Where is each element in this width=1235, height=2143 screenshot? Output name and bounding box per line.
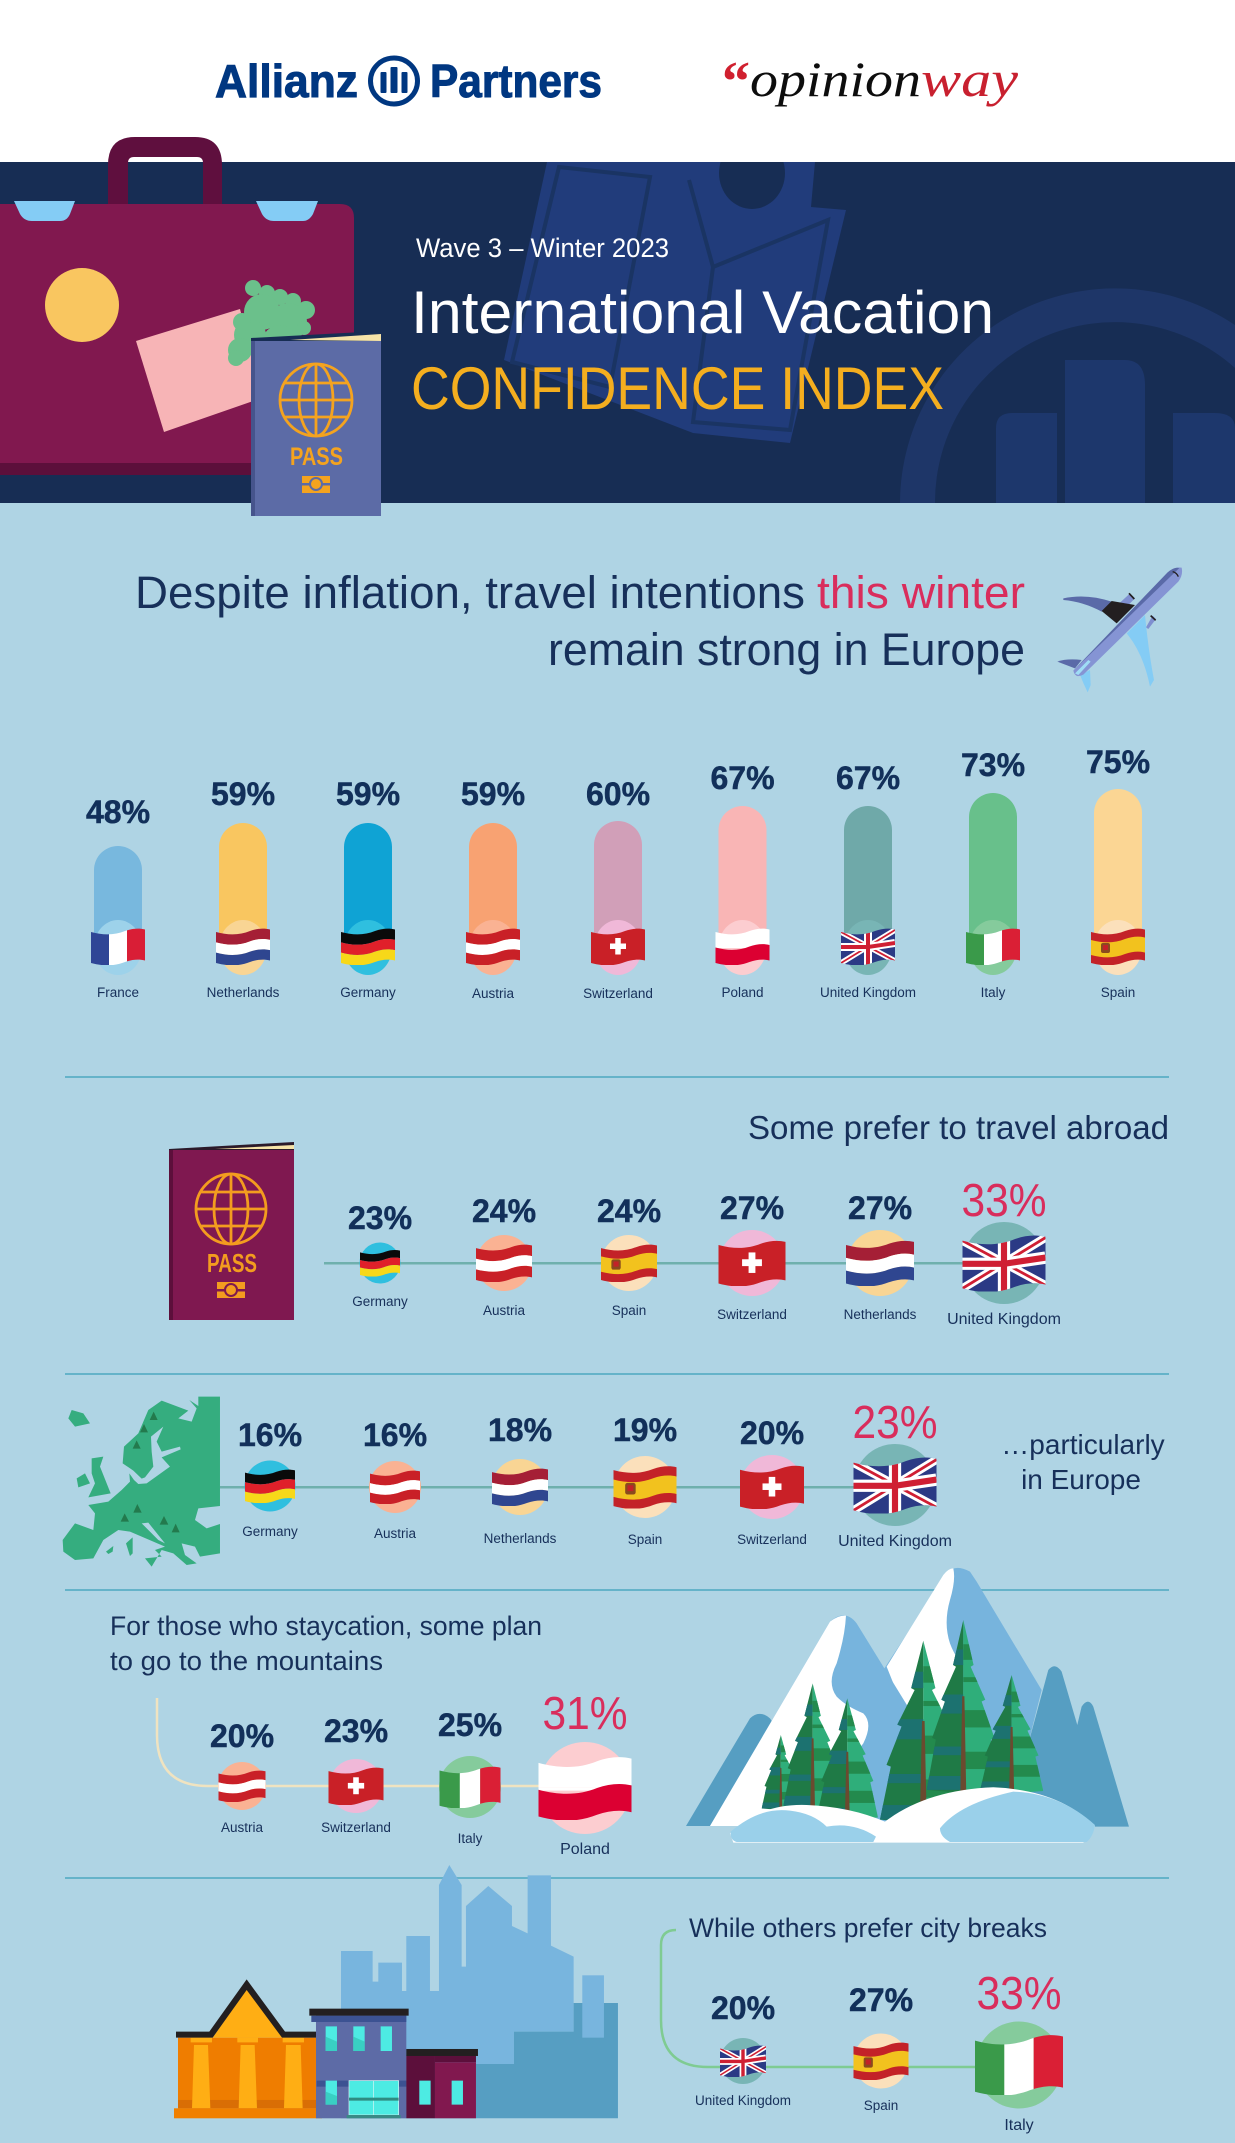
point: Austria 24%: 24% [472, 1193, 536, 1229]
point: Italy 33%: Italy [1004, 2117, 1034, 2134]
text: particularly in Europe: …particularly [1001, 1429, 1165, 1460]
point: Spain 19%: 19% [613, 1412, 677, 1448]
point: United Kingdom 20% [695, 1990, 791, 2108]
icon: maroon passport: PASS [207, 1248, 257, 1278]
point: United Kingdom 20%: United Kingdom [695, 2093, 791, 2108]
bar: Italy 73% [961, 747, 1025, 1000]
point: Germany 23%: Germany [352, 1294, 408, 1309]
logo: opinionway [722, 51, 1019, 113]
bar: Spain 75%: 75% [1086, 744, 1150, 780]
logo: Allianz Partners: Allianz [215, 55, 358, 107]
point: Spain 27%: 27% [849, 1982, 913, 2018]
point: United Kingdom 23%: 23% [852, 1396, 938, 1448]
chart: city breaks timeline [661, 1930, 1063, 2134]
bar: Germany 59%: 59% [336, 776, 400, 812]
point: Switzerland 23% [321, 1713, 391, 1835]
point: Austria 16%: Austria [374, 1526, 416, 1541]
point: Germany 16% [238, 1417, 302, 1539]
point: Italy 25%: 25% [438, 1707, 502, 1743]
point: Italy 33% [975, 1967, 1063, 2134]
bar: Netherlands 59%: 59% [211, 776, 275, 812]
point: Austria 24%: Austria [483, 1303, 525, 1318]
point: Switzerland 20%: 20% [740, 1415, 804, 1451]
chart: Europe timeline [220, 1396, 952, 1550]
point: Austria 16% [363, 1417, 427, 1541]
point: Austria 24% [472, 1193, 536, 1318]
point: Germany 16%: 16% [238, 1417, 302, 1453]
point: Switzerland 20%: Switzerland [737, 1532, 807, 1547]
point: Spain 27%: Spain [864, 2098, 898, 2113]
point: Netherlands 27%: 27% [848, 1190, 912, 1226]
point: Germany 16%: Germany [242, 1524, 298, 1539]
logo: Allianz Partners: Partners [430, 55, 602, 107]
main heading: remain strong in Europe [548, 624, 1025, 675]
heading: staycation mountains: to go to the mountains [110, 1646, 383, 1676]
bar: United Kingdom 67%: United Kingdom [820, 985, 916, 1000]
point: Poland 31% [538, 1687, 632, 1858]
point: Switzerland 27%: 27% [720, 1190, 784, 1226]
logo: opinionway: opinion [750, 51, 921, 107]
illustration: city skyline and buildings [174, 1865, 618, 2118]
point: Spain 19%: Spain [628, 1532, 662, 1547]
logo: Allianz Partners [215, 55, 602, 107]
bar: Switzerland 60% [583, 776, 653, 1001]
banner background [0, 162, 1235, 503]
logo: opinionway: “ [722, 51, 750, 113]
chart: travel abroad timeline [324, 1174, 1061, 1328]
bar: France 48% [86, 794, 150, 1000]
bar: Switzerland 60%: Switzerland [583, 986, 653, 1001]
bar: Austria 59%: 59% [461, 776, 525, 812]
bar: France 48%: 48% [86, 794, 150, 830]
point: United Kingdom 33%: 33% [962, 1174, 1046, 1226]
icon: Europe map [63, 1397, 220, 1567]
point: Spain 27% [849, 1982, 913, 2113]
bar: Poland 67%: Poland [721, 985, 764, 1000]
bar: United Kingdom 67%: 67% [836, 760, 900, 796]
bar: Netherlands 59% [207, 776, 280, 1000]
subtitle: wave: Wave 3 – Winter 2023 [416, 233, 669, 263]
icon: blue passport [251, 331, 381, 516]
point: Spain 24%: Spain [612, 1303, 646, 1318]
point: Switzerland 27% [717, 1190, 787, 1322]
point: Switzerland 23%: Switzerland [321, 1820, 391, 1835]
bar: Germany 59% [336, 776, 400, 1000]
point: United Kingdom 20%: 20% [711, 1990, 775, 2026]
title line 2: CONFIDENCE INDEX [411, 355, 944, 422]
point: Netherlands 18% [484, 1412, 557, 1546]
heading: staycation mountains [110, 1611, 542, 1676]
chart: confidence index bars [86, 744, 1150, 1001]
point: Spain 19% [613, 1412, 677, 1547]
heading: travel abroad: Some prefer to travel abroad [748, 1109, 1169, 1146]
logo: opinionway: way [921, 51, 1019, 107]
main heading [135, 567, 1025, 675]
bar: United Kingdom 67% [820, 760, 916, 1000]
point: Germany 23%: 23% [348, 1200, 412, 1236]
point: United Kingdom 23% [838, 1396, 952, 1550]
icon: maroon passport [169, 1142, 294, 1320]
point: Germany 23% [348, 1200, 412, 1309]
bar: Germany 59%: Germany [340, 985, 396, 1000]
illustration: snowy mountains and trees [686, 1568, 1129, 1843]
point: Netherlands 18%: Netherlands [484, 1531, 557, 1546]
point: Netherlands 27% [844, 1190, 917, 1322]
bar: Italy 73%: 73% [961, 747, 1025, 783]
text: particularly in Europe: in Europe [1021, 1464, 1141, 1495]
main heading: this winter [817, 567, 1025, 618]
point: United Kingdom 23%: United Kingdom [838, 1533, 952, 1550]
icon: blue passport: PASS [290, 443, 343, 471]
point: Switzerland 23%: 23% [324, 1713, 388, 1749]
banner decoration: luggage tag [504, 137, 846, 443]
heading: staycation mountains: For those who staycation, some plan [110, 1611, 542, 1641]
point: Spain 24% [597, 1193, 661, 1318]
point: Austria 20%: Austria [221, 1820, 263, 1835]
bar: Austria 59%: Austria [472, 986, 514, 1001]
point: United Kingdom 33% [947, 1174, 1061, 1328]
banner decoration: Allianz emblem [900, 288, 1235, 503]
point: Italy 33%: 33% [976, 1967, 1062, 2019]
bar: Poland 67%: 67% [710, 760, 775, 796]
text: particularly in Europe [1001, 1429, 1165, 1495]
point: Austria 20% [210, 1718, 274, 1835]
point: Italy 25% [438, 1707, 502, 1846]
point: Austria 16%: 16% [363, 1417, 427, 1453]
point: Italy 25%: Italy [458, 1831, 483, 1846]
bar: Spain 75%: Spain [1101, 985, 1135, 1000]
point: Austria 20%: 20% [210, 1718, 274, 1754]
point: Poland 31%: 31% [542, 1687, 628, 1739]
header white band [0, 0, 1235, 162]
icon: airplane [1057, 568, 1182, 692]
point: Netherlands 27%: Netherlands [844, 1307, 917, 1322]
point: Poland 31%: Poland [560, 1841, 610, 1858]
point: Spain 24%: 24% [597, 1193, 661, 1229]
bar: Austria 59% [461, 776, 525, 1001]
bar: Italy 73%: Italy [981, 985, 1006, 1000]
heading: city breaks: While others prefer city breaks [689, 1913, 1047, 1943]
bar: France 48%: France [97, 985, 139, 1000]
point: United Kingdom 33%: United Kingdom [947, 1311, 1061, 1328]
main heading: Despite inflation, travel intentions [135, 567, 805, 618]
chart: mountains timeline [157, 1687, 632, 1858]
point: Netherlands 18%: 18% [488, 1412, 552, 1448]
bar: Netherlands 59%: Netherlands [207, 985, 280, 1000]
bar: Poland 67% [710, 760, 775, 1000]
point: Switzerland 27%: Switzerland [717, 1307, 787, 1322]
bar: Spain 75% [1086, 744, 1150, 1000]
icon: suitcase [0, 137, 354, 475]
bar: Switzerland 60%: 60% [586, 776, 650, 812]
title line 1: International Vacation [411, 279, 994, 346]
point: Switzerland 20% [737, 1415, 807, 1547]
